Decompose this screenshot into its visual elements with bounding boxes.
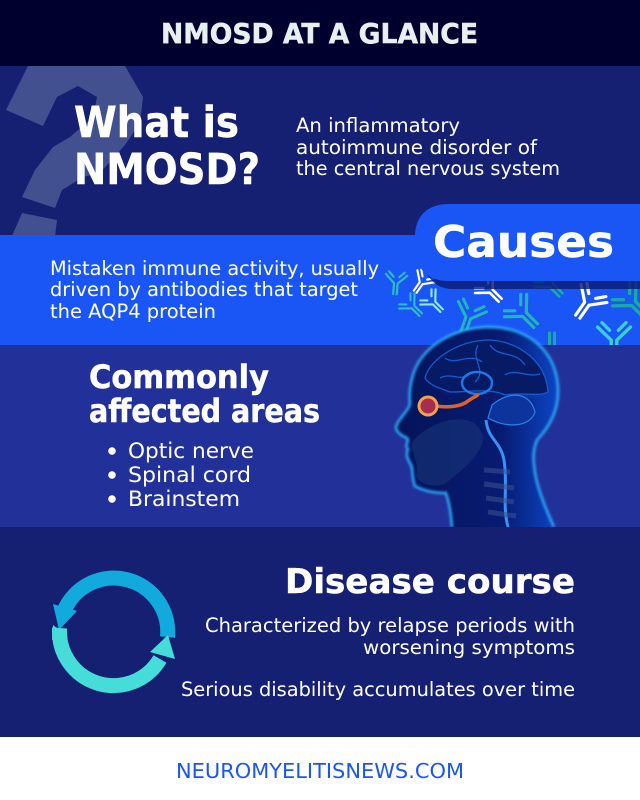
heading: commonly affected areas [89, 358, 320, 430]
disease course text: Characterized by relapse periods with [205, 614, 575, 637]
causes text: Mistaken immune activity, usually [50, 257, 379, 280]
definition text: autoimmune disorder of [296, 136, 538, 159]
eye [418, 396, 438, 416]
list of areas: Brainstem [128, 487, 240, 511]
cerebellum [488, 395, 535, 425]
disease course text: Serious disability accumulates over time [181, 678, 575, 701]
disease course text: worsening symptoms [363, 636, 575, 659]
definition text [296, 114, 560, 180]
icon: question mark [6, 66, 143, 236]
list of areas: Optic nerve [128, 439, 254, 463]
causes tab [415, 204, 640, 281]
list of areas: Spinal cord [128, 463, 251, 487]
definition text: An inflammatory [296, 114, 460, 137]
causes text: driven by antibodies that target [50, 278, 358, 301]
spinal cord [486, 420, 508, 527]
causes text [50, 257, 379, 323]
skull [412, 419, 483, 486]
optic nerve [436, 394, 478, 407]
heading: what is NMOSD: NMOSD? [74, 146, 260, 195]
heading: what is NMOSD [74, 99, 260, 195]
title: NMOSD AT A GLANCE [161, 18, 478, 50]
definition text: the central nervous system [296, 157, 560, 180]
heading: what is NMOSD: What is [74, 99, 239, 148]
icon: relapse cycle arrows [52, 578, 175, 686]
antibodies [384, 268, 640, 345]
heading: commonly affected areas: affected areas [89, 392, 320, 430]
footer: website: NEUROMYELITISNEWS.COM [176, 759, 464, 783]
header band [0, 0, 640, 66]
list of areas [108, 439, 254, 511]
heading: commonly affected areas: Commonly [89, 358, 269, 396]
panel: commonly affected areas [0, 327, 640, 527]
panel: disease course [0, 527, 640, 737]
heading: disease course: Disease course [285, 562, 575, 602]
causes tab shadow [416, 225, 640, 289]
panel: what is NMOSD [0, 66, 640, 236]
heading: causes: Causes [433, 217, 614, 268]
brain [425, 340, 548, 395]
causes text: the AQP4 protein [50, 300, 216, 323]
illustration: head with optic nerve [396, 327, 558, 527]
panel: causes [0, 204, 640, 345]
disease course text [181, 614, 575, 701]
